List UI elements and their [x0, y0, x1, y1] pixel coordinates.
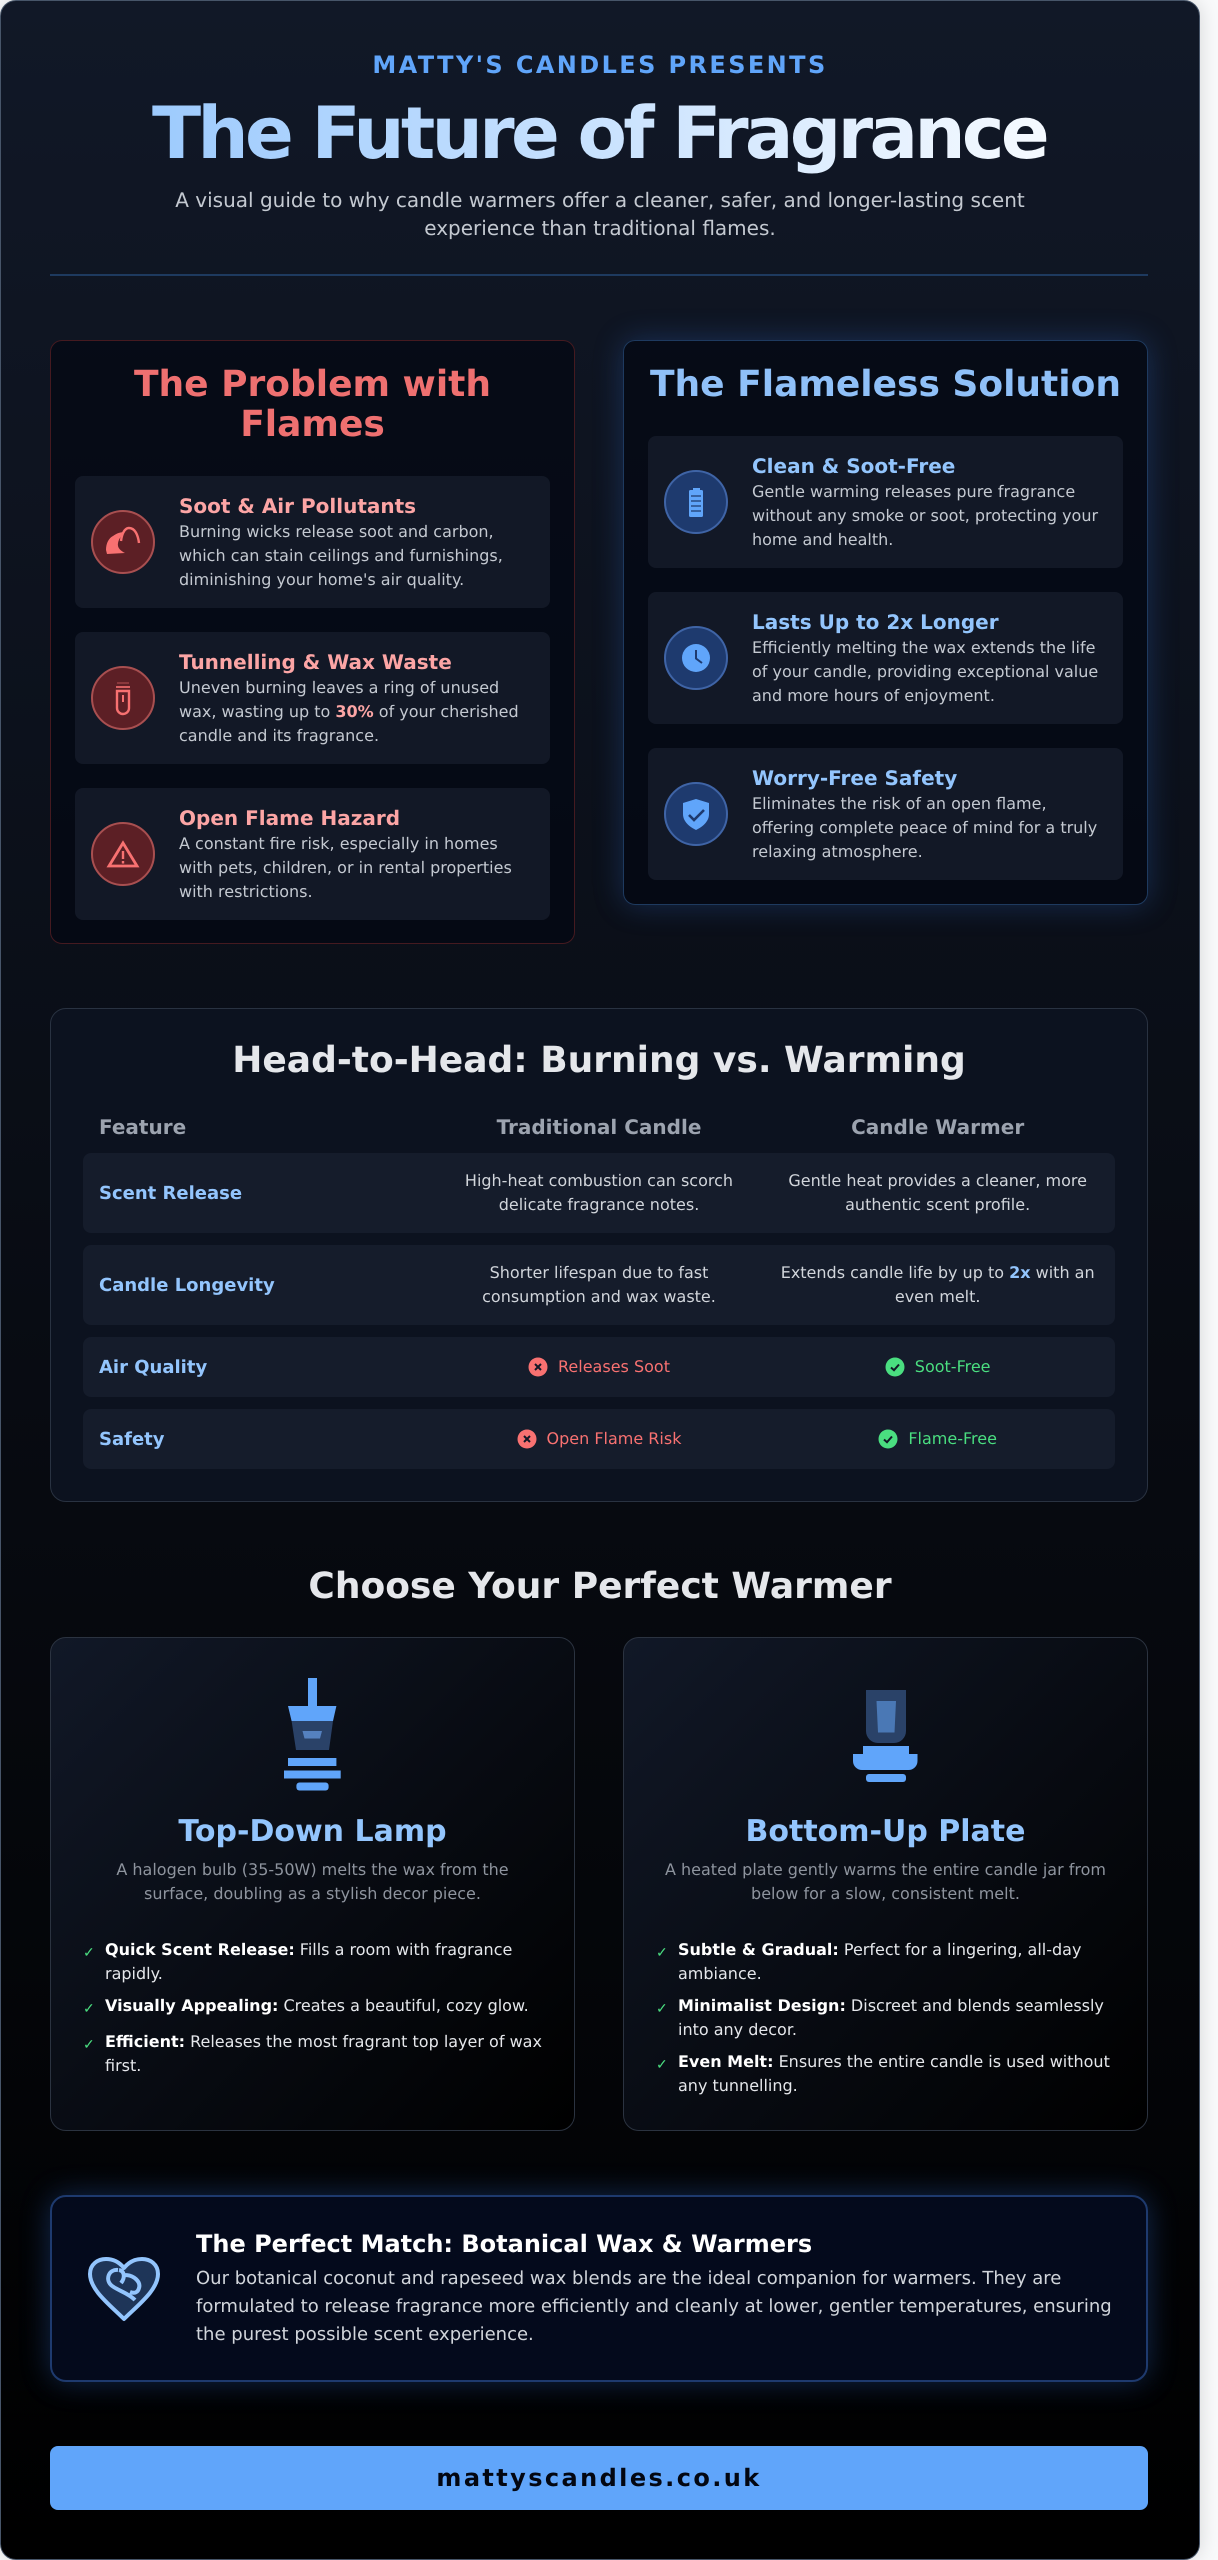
row: safety: Flame-Free — [908, 1429, 997, 1448]
icon: tunnelling jar — [91, 666, 155, 730]
card: soot and air pollutants — [75, 476, 550, 608]
card: lasts longer: of your candle, providing exceptional value — [752, 662, 1098, 681]
heading: problem: The Problem with — [134, 364, 491, 405]
subtitle: A visual guide to why candle warmers offer a cleaner, safer, and longer-lasting scent — [175, 188, 1025, 212]
list: lamp benefits: Efficient: Releases the most fragrant top layer of wax — [105, 2032, 542, 2051]
description: plate: below for a slow, consistent melt. — [751, 1884, 1020, 1903]
card: lasts longer: and more hours of enjoyment. — [752, 686, 995, 705]
subtitle: experience than traditional flames. — [424, 216, 776, 240]
panel: comparison table — [50, 1008, 1148, 1502]
card: clean and soot-free: without any smoke or soot, protecting your — [752, 506, 1098, 525]
heading: problem: Flames — [240, 404, 385, 445]
list: plate benefits: ✓ — [656, 2057, 668, 2073]
list: plate benefits: any tunnelling. — [678, 2076, 798, 2095]
row: safety: Safety — [99, 1428, 164, 1450]
row: safety: Open Flame Risk — [547, 1429, 681, 1448]
list: lamp benefits: rapidly. — [105, 1964, 163, 1983]
card: soot and air pollutants: diminishing your home's air quality. — [179, 570, 464, 589]
table header: Candle Warmer — [851, 1115, 1024, 1139]
row: scent release: Scent Release — [99, 1182, 242, 1204]
main title: The Future of Fragrance — [152, 91, 1046, 175]
callout heading: The Perfect Match: Botanical Wax & Warmers — [196, 2230, 812, 2258]
row: candle longevity — [83, 1245, 1115, 1325]
card: tunnelling and wax waste: Uneven burning leaves a ring of unused — [179, 678, 499, 697]
icon: warning triangle — [91, 822, 155, 886]
description: plate — [665, 1860, 1106, 1903]
list: plate benefits: ✓ — [656, 1945, 668, 1961]
card: tunnelling and wax waste: Tunnelling & Wax Waste — [179, 650, 452, 674]
card: lasts longer — [648, 592, 1123, 724]
card: clean and soot-free: Clean & Soot-Free — [752, 454, 955, 478]
card: open flame hazard: A constant fire risk, especially in homes — [179, 834, 498, 853]
card: worry-free safety: Worry-Free Safety — [752, 766, 957, 790]
footer button — [50, 2446, 1148, 2510]
table header — [99, 1115, 1024, 1139]
list: lamp benefits: Visually Appealing: Creates a beautiful, cozy glow. — [105, 1996, 529, 2015]
card: clean and soot-free: Gentle warming releases pure fragrance — [752, 482, 1075, 501]
card: soot and air pollutants: Burning wicks release soot and carbon, — [179, 522, 494, 541]
row: candle longevity: Candle Longevity — [99, 1274, 275, 1296]
row: safety — [83, 1409, 1115, 1469]
card: open flame hazard: with restrictions. — [179, 882, 313, 901]
card: lasts longer: Lasts Up to 2x Longer — [752, 610, 999, 634]
icon: lamp — [284, 1678, 341, 1790]
row: air quality: Soot-Free — [915, 1357, 991, 1376]
list: plate benefits: ambiance. — [678, 1964, 762, 1983]
card: worry-free safety — [648, 748, 1123, 880]
list: plate benefits: Minimalist Design: Discreet and blends seamlessly — [678, 1996, 1104, 2015]
table header: Feature — [99, 1115, 186, 1139]
panel: bottom-up plate — [623, 1637, 1148, 2131]
list: lamp benefits: ✓ — [83, 2037, 95, 2053]
card: open flame hazard: with pets, children, or in rental properties — [179, 858, 512, 877]
callout body: Our botanical coconut and rapeseed wax blends are the ideal companion for warmers. They are — [196, 2268, 1061, 2289]
list: lamp benefits: Quick Scent Release: Fills a room with fragrance — [105, 1940, 512, 1959]
heading: comparison: Head-to-Head: Burning vs. Warming — [232, 1040, 966, 1081]
row: scent release: delicate fragrance notes. — [499, 1195, 699, 1214]
description: lamp — [116, 1860, 509, 1903]
panel: top-down lamp — [50, 1637, 575, 2131]
card: open flame hazard: Open Flame Hazard — [179, 806, 400, 830]
card: tunnelling and wax waste — [75, 632, 550, 764]
card: tunnelling and wax waste: wax, wasting up to 30% of your cherished — [179, 702, 519, 721]
list: plate benefits: Even Melt: Ensures the entire candle is used without — [678, 2052, 1110, 2071]
list: plate benefits: ✓ — [656, 2001, 668, 2017]
list: lamp benefits: first. — [105, 2056, 141, 2075]
row: scent release — [83, 1153, 1115, 1233]
list: lamp benefits: ✓ — [83, 1945, 95, 1961]
card: worry-free safety: offering complete peace of mind for a truly — [752, 818, 1097, 837]
footer button: mattyscandles.co.uk — [436, 2464, 762, 2492]
row: air quality: Releases Soot — [558, 1357, 670, 1376]
row: scent release: authentic scent profile. — [845, 1195, 1030, 1214]
row: air quality: Air Quality — [99, 1356, 207, 1378]
panel: the problem with flames — [50, 340, 575, 944]
card: tunnelling and wax waste: candle and its fragrance. — [179, 726, 379, 745]
callout body: formulated to release fragrance more efficiently and cleanly at lower, gentler temperatures, ensuring — [196, 2296, 1112, 2317]
row: scent release: High-heat combustion can scorch — [465, 1171, 733, 1190]
description: lamp: surface, doubling as a stylish decor piece. — [144, 1884, 481, 1903]
card: worry-free safety: Eliminates the risk of an open flame, — [752, 794, 1047, 813]
heading: problem — [134, 364, 491, 445]
card: soot and air pollutants: Soot & Air Pollutants — [179, 494, 416, 518]
card: soot and air pollutants: which can stain ceilings and furnishings, — [179, 546, 503, 565]
list: plate benefits: Subtle & Gradual: Perfect for a lingering, all-day — [678, 1940, 1081, 1959]
card: lasts longer: Efficiently melting the wax extends the life — [752, 638, 1095, 657]
panel: the flameless solution — [623, 340, 1148, 905]
icon: soot — [91, 510, 155, 574]
card: clean and soot-free: home and health. — [752, 530, 893, 549]
callout body — [196, 2268, 1112, 2345]
callout: the perfect match — [50, 2195, 1148, 2382]
list: plate benefits: into any decor. — [678, 2020, 797, 2039]
heading: choose your warmer: Choose Your Perfect Warmer — [308, 1566, 892, 1607]
card: worry-free safety: relaxing atmosphere. — [752, 842, 923, 861]
title: bottom-up plate: Bottom-Up Plate — [746, 1814, 1025, 1849]
row: scent release: Gentle heat provides a cleaner, more — [788, 1171, 1087, 1190]
callout body: the purest possible scent experience. — [196, 2324, 534, 2345]
description: plate: A heated plate gently warms the entire candle jar from — [665, 1860, 1106, 1879]
table header: Traditional Candle — [497, 1115, 701, 1139]
list: lamp benefits: ✓ — [83, 2001, 95, 2017]
icon: battery — [664, 470, 728, 534]
description: lamp: A halogen bulb (35-50W) melts the wax from the — [116, 1860, 509, 1879]
pre-title: MATTY'S CANDLES PRESENTS — [372, 51, 828, 79]
list: lamp benefits — [83, 1940, 542, 2075]
title: top-down lamp: Top-Down Lamp — [178, 1814, 447, 1849]
icon: clock — [664, 626, 728, 690]
list: plate benefits — [656, 1940, 1110, 2095]
row: candle longevity: consumption and wax waste. — [482, 1287, 716, 1306]
icon: shield — [664, 782, 728, 846]
row: candle longevity: Extends candle life by up to 2x with an — [781, 1263, 1095, 1282]
row: air quality — [83, 1337, 1115, 1397]
subtitle — [175, 188, 1025, 240]
row: candle longevity: Shorter lifespan due to fast — [490, 1263, 708, 1282]
card: clean and soot-free — [648, 436, 1123, 568]
row: candle longevity: even melt. — [895, 1287, 980, 1306]
heading: solution: The Flameless Solution — [650, 364, 1121, 405]
icon: heart — [88, 2257, 160, 2322]
card: open flame hazard — [75, 788, 550, 920]
icon: plate warmer — [853, 1690, 918, 1782]
